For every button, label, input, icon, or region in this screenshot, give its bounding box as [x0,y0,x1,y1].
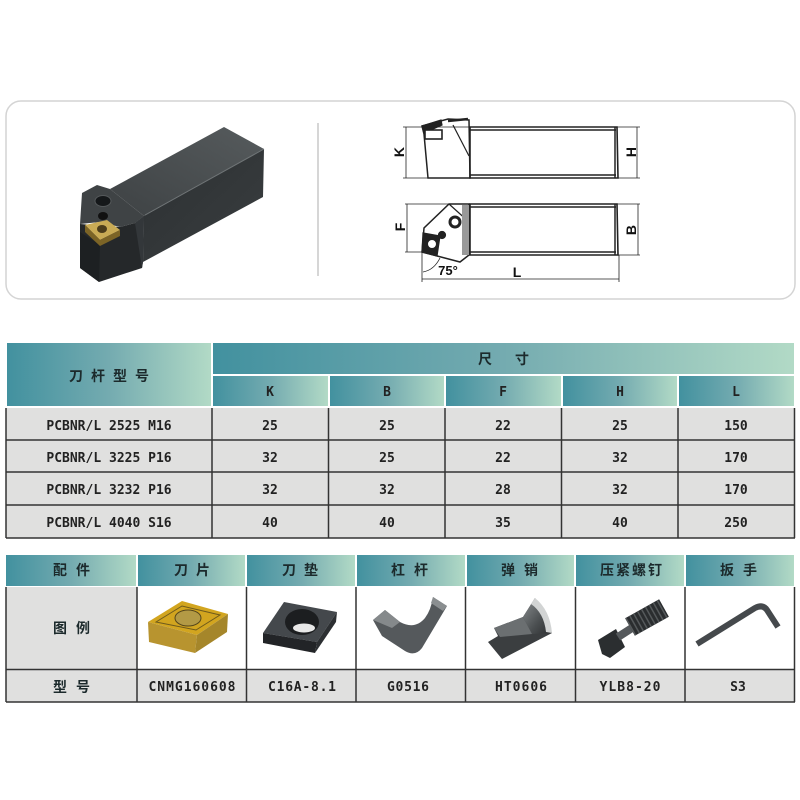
sub-headers: K B F H L: L [732,385,740,400]
data rows: PCBNR/L 2525 M16 [46,419,172,434]
body grid: CNMG160608 [148,680,236,695]
header row: 杠杆 [391,562,428,578]
sub-headers: K B F H L: F [499,385,507,400]
sub-headers: K B F H L: B [383,385,391,400]
panel: product views [6,101,795,299]
data rows: PCBNR/L 3225 P16 [46,451,172,466]
body grid: 型号 [53,679,90,695]
table: dimensions [6,343,795,538]
icon: technical drawing, side view [403,119,640,178]
data rows: 40 [379,516,395,531]
header: tool holder model: 刀杆型号 [69,368,149,384]
data rows: 150 [724,419,748,434]
sub-headers: K B F H L: K [266,385,274,400]
header: dimensions: 尺寸 [478,351,529,367]
data rows: 32 [379,483,395,498]
data rows: 32 [612,451,628,466]
label: 75 degrees: 75° [438,263,458,278]
data rows: 25 [379,419,395,434]
data rows: 25 [612,419,628,434]
icon: 3D tool holder [80,127,264,282]
body grid [6,587,795,702]
sub-headers: K B F H L [213,376,794,406]
icon: lever [373,597,447,653]
data rows [6,408,795,538]
header row: 刀片 [174,562,210,578]
data rows: 40 [612,516,628,531]
label: L: L [513,264,522,280]
body grid: 图例 [53,620,90,636]
label: H: H [623,147,639,157]
body grid: C16A-8.1 [268,680,336,695]
data rows: 35 [495,516,511,531]
table: accessories [6,555,795,702]
data rows: 22 [495,451,511,466]
data rows: 170 [724,451,748,466]
header row: 弹销 [501,562,538,578]
header row: 刀垫 [282,562,318,578]
header row: 压紧螺钉 [600,562,662,578]
icon: shim [263,602,337,653]
data rows: 40 [262,516,278,531]
label: F: F [392,222,408,231]
icon: technical drawing, top view [405,204,640,282]
label: B: B [623,225,639,235]
data rows: 250 [724,516,748,531]
data rows: 28 [495,483,511,498]
icon: spring pin [488,598,552,659]
sub-headers: K B F H L: H [616,385,624,400]
data rows: PCBNR/L 4040 S16 [46,516,172,531]
data rows: 170 [724,483,748,498]
data rows: 32 [612,483,628,498]
label: K: K [391,147,407,157]
body grid: YLB8-20 [600,680,661,695]
header row: 扳手 [720,562,757,578]
header: dimensions [213,343,794,374]
data rows: 32 [262,451,278,466]
header row [6,555,794,586]
data rows: 22 [495,419,511,434]
icon: insert [148,601,228,653]
body grid: S3 [730,680,746,695]
header row: 配件 [53,562,90,578]
icon: hex wrench [697,606,778,644]
data rows: 25 [262,419,278,434]
data rows: 32 [262,483,278,498]
body grid: HT0606 [495,680,547,695]
icon: clamp screw [598,608,664,658]
data rows: PCBNR/L 3232 P16 [46,483,172,498]
data rows: 25 [379,451,395,466]
body grid: G0516 [387,680,429,695]
header: tool holder model [7,343,211,406]
